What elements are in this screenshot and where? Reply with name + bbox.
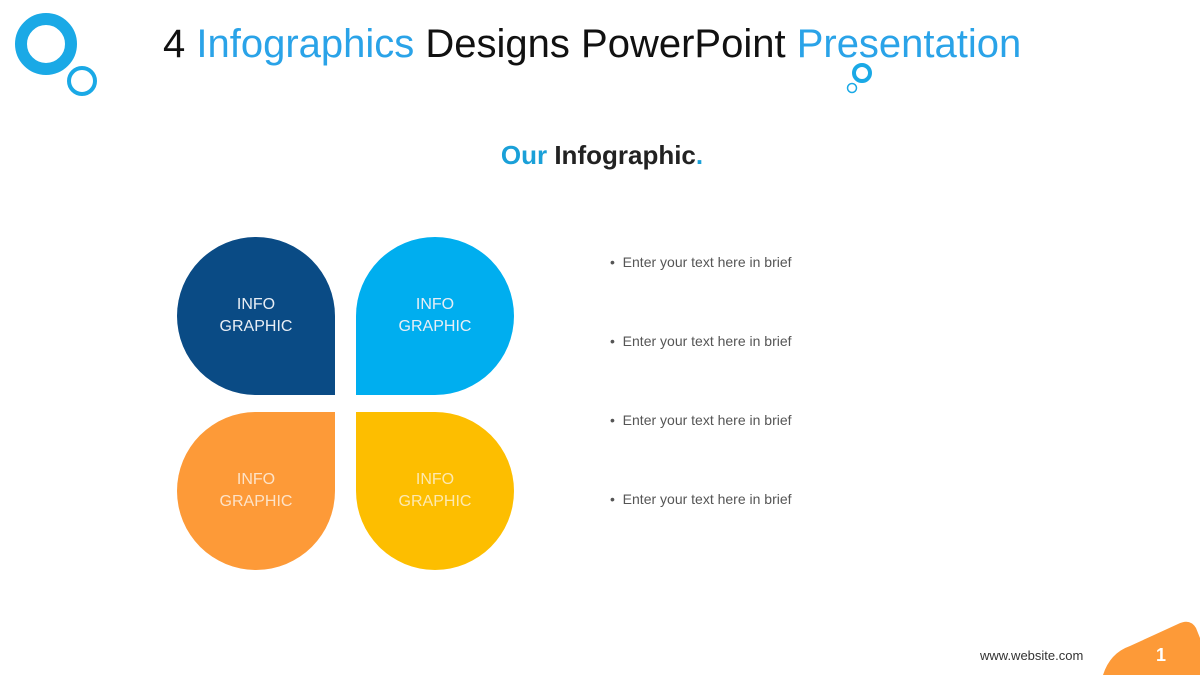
icon: small circles near title [846,63,872,94]
panel: petal orange: GRAPHIC [220,493,292,510]
panel: petal orange: INFO [237,471,275,488]
panel: petal dark blue: INFO [237,296,275,313]
title: 4 Infographics Designs PowerPoint Presentation [163,22,1021,66]
panel: petal dark blue: GRAPHIC [220,318,292,335]
page number badge: 1 [1156,645,1166,665]
subheading: Our Infographic. [501,140,703,170]
panel: petal light blue: GRAPHIC [399,318,471,335]
text block: bullet 3: • Enter your text here in brief [610,412,792,428]
icon: decorative circles top-left [15,13,97,96]
panel: petal light blue [356,237,514,395]
panel: petal dark blue [177,237,335,395]
panel: petal light blue: INFO [416,296,454,313]
panel: petal orange [177,412,335,570]
panel: petal yellow [356,412,514,570]
text block: bullet 4: • Enter your text here in brief [610,491,792,507]
panel: petal yellow: INFO [416,471,454,488]
text block: bullet 1: • Enter your text here in brief [610,254,792,270]
text block: bullet 2: • Enter your text here in brief [610,333,792,349]
panel: petal yellow: GRAPHIC [399,493,471,510]
footer website: www.website.com [980,648,1083,663]
page number badge [1103,622,1200,675]
